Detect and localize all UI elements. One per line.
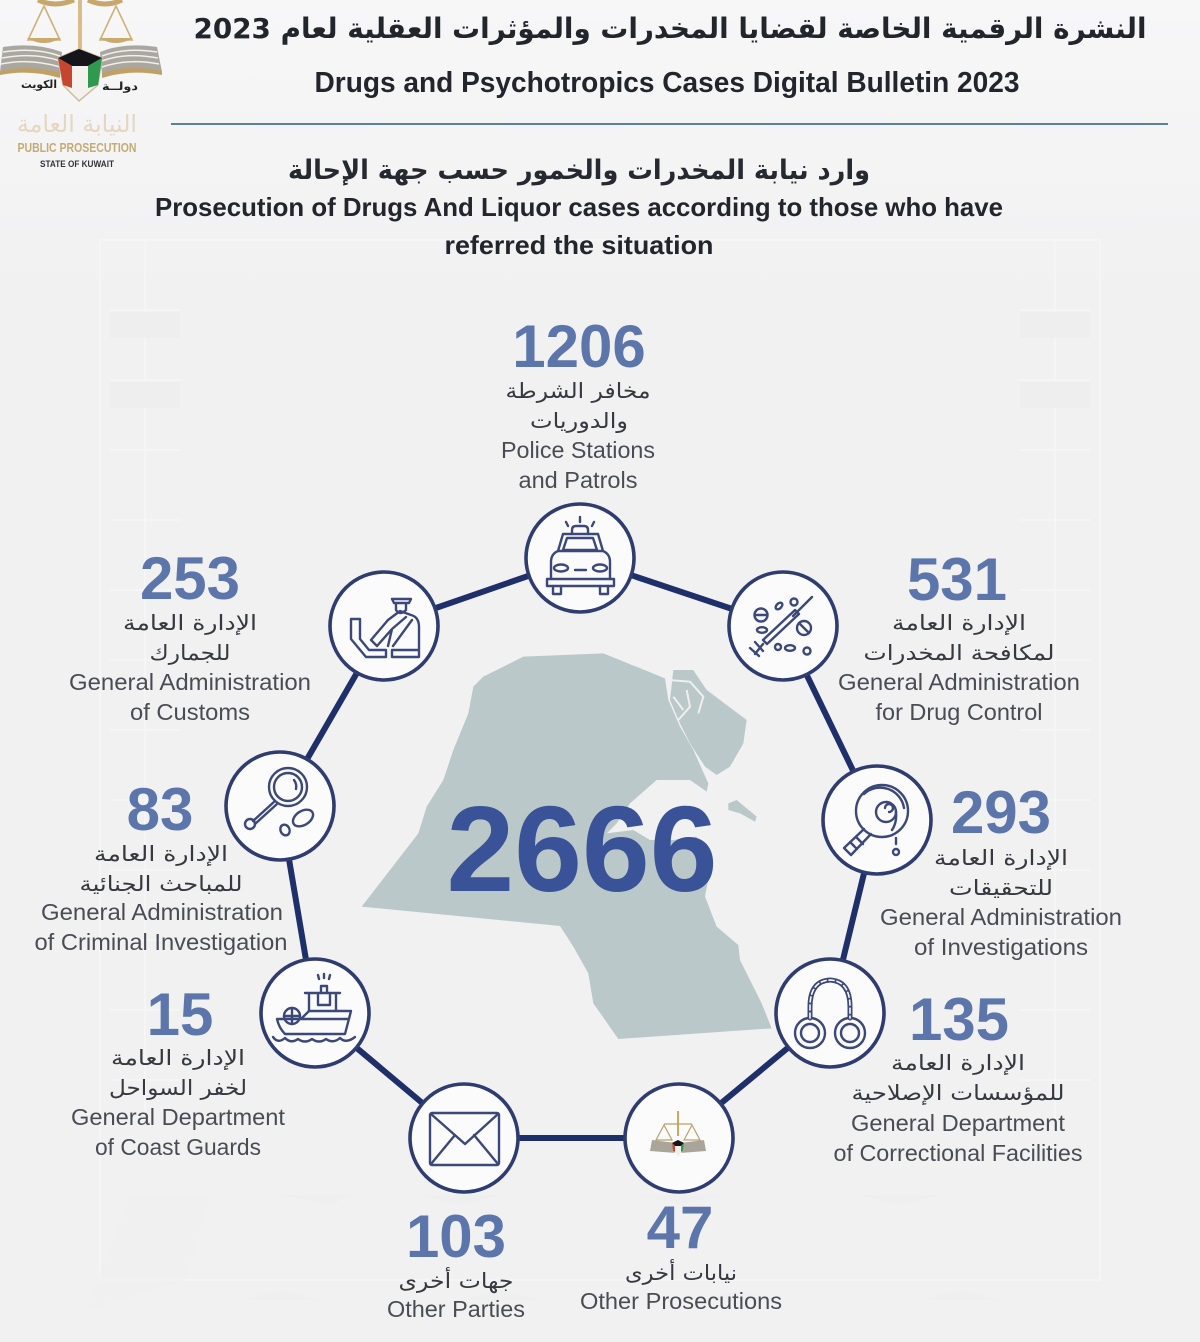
subtitle: English: Prosecution of Drugs And Liquor cases according to those who have	[155, 192, 1003, 222]
label: coast guards: لخفر السواحل	[109, 1076, 247, 1100]
logo: Public Prosecution State of Kuwait: الكويت	[21, 78, 57, 91]
label: customs: 253	[140, 545, 240, 612]
label: criminal investigation: الإدارة العامة	[94, 842, 228, 866]
label: criminal investigation: General Administration	[41, 899, 283, 925]
label: customs	[69, 545, 311, 725]
network connector lines	[280, 558, 877, 1138]
label: police stations: 1206	[512, 313, 646, 380]
label: drug control: for Drug Control	[876, 699, 1042, 725]
header rule	[171, 123, 1168, 125]
label: police stations: مخافر الشرطة	[506, 379, 650, 403]
node: correctional facilities icon	[776, 959, 884, 1067]
label: customs: General Administration	[69, 669, 311, 695]
logo: Public Prosecution State of Kuwait: دولــة	[102, 80, 138, 93]
logo: Public Prosecution State of Kuwait: النيابة العامة	[17, 110, 137, 138]
label: correctional facilities	[834, 986, 1082, 1166]
label: coast guards: General Department	[71, 1104, 286, 1130]
total number: 2666	[446, 781, 718, 917]
label: correctional facilities: of Correctional Facilities	[834, 1140, 1082, 1166]
label: other prosecutions: نيابات أخرى	[625, 1259, 737, 1285]
node: other parties icon	[410, 1084, 518, 1192]
node: customs icon	[330, 572, 438, 680]
label: other prosecutions	[580, 1194, 782, 1314]
label: police stations: and Patrols	[518, 467, 638, 493]
label: police stations: والدوريات	[530, 409, 628, 433]
label: investigations: General Administration	[880, 904, 1122, 930]
label: correctional facilities: 135	[909, 986, 1009, 1053]
label: drug control	[838, 546, 1080, 725]
logo: Public Prosecution State of Kuwait	[0, 0, 162, 169]
node: investigations icon	[823, 766, 931, 874]
label: drug control: 531	[907, 546, 1007, 613]
label: other parties: Other Parties	[387, 1296, 525, 1322]
label: other prosecutions: 47	[647, 1194, 713, 1261]
label: other parties	[387, 1203, 525, 1322]
label: correctional facilities: الإدارة العامة	[891, 1051, 1025, 1075]
label: coast guards: 15	[147, 981, 213, 1048]
logo: Public Prosecution State of Kuwait: STATE OF KUWAIT	[40, 159, 114, 169]
node: criminal investigation icon	[226, 752, 334, 860]
label: investigations: للتحقيقات	[949, 876, 1053, 900]
subtitle: English	[155, 192, 1003, 260]
title: English: Drugs and Psychotropics Cases Digital Bulletin 2023	[314, 67, 1020, 99]
label: drug control: General Administration	[838, 669, 1080, 695]
label: investigations	[880, 779, 1122, 960]
subtitle: English: referred the situation	[444, 230, 714, 260]
label: correctional facilities: للمؤسسات الإصلاحية	[852, 1081, 1064, 1105]
label: investigations: الإدارة العامة	[934, 846, 1068, 870]
node: police stations icon	[526, 504, 634, 612]
logo: Public Prosecution State of Kuwait: PUBLIC PROSECUTION	[18, 141, 136, 155]
label: police stations	[501, 313, 655, 493]
label: coast guards: of Coast Guards	[95, 1134, 261, 1160]
label: police stations: Police Stations	[501, 437, 655, 463]
label: criminal investigation: للمباحث الجنائية	[80, 872, 242, 896]
label: criminal investigation	[34, 776, 288, 955]
subtitle: Arabic: وارد نيابة المخدرات والخمور حسب جهة الإحالة	[288, 155, 870, 186]
label: investigations: 293	[951, 779, 1051, 846]
label: other prosecutions: Other Prosecutions	[580, 1288, 782, 1314]
label: customs: للجمارك	[150, 641, 230, 665]
label: customs: الإدارة العامة	[123, 611, 257, 635]
label: coast guards: الإدارة العامة	[111, 1046, 245, 1070]
label: drug control: لمكافحة المخدرات	[864, 641, 1054, 665]
title: Arabic: النشرة الرقمية الخاصة لقضايا المخدرات والمؤثرات العقلية لعام 2023	[194, 12, 1146, 45]
label: criminal investigation: 83	[127, 776, 193, 843]
map of Kuwait	[362, 653, 772, 1039]
label: drug control: الإدارة العامة	[892, 611, 1026, 635]
label: other parties: 103	[406, 1203, 506, 1270]
label: other parties: جهات أخرى	[398, 1267, 514, 1293]
label: correctional facilities: General Department	[851, 1110, 1066, 1136]
node: coast guards icon	[261, 959, 369, 1067]
label: customs: of Customs	[130, 699, 250, 725]
node: drug control icon	[729, 572, 837, 680]
node: other prosecutions icon	[625, 1084, 733, 1192]
label: investigations: of Investigations	[914, 934, 1088, 960]
label: criminal investigation: of Criminal Investigation	[34, 929, 288, 955]
label: coast guards	[71, 981, 286, 1160]
